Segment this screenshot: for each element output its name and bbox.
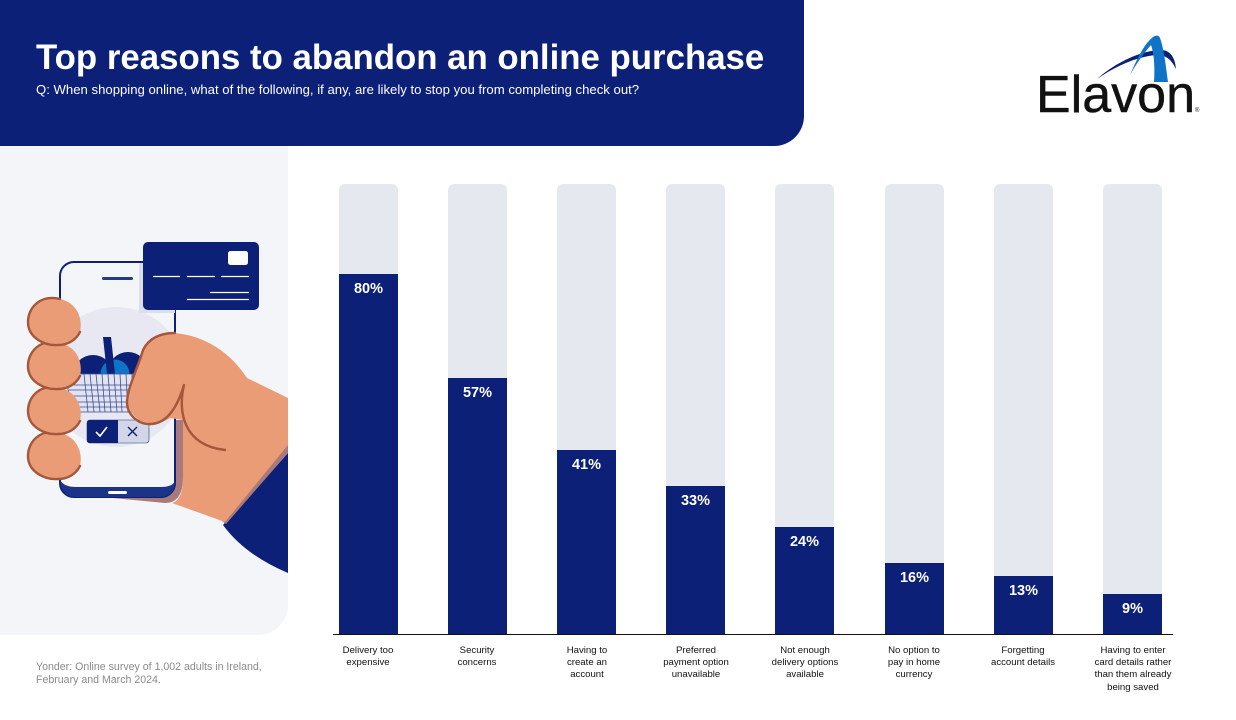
basket contents [73,337,148,395]
bar: Forgetting account details 13% [994,184,1053,635]
label: Not enough delivery options available: delivery options [772,657,838,668]
label: Preferred payment option unavailable [663,645,729,680]
label: Not enough delivery options available: available [786,669,824,680]
label: Delivery too expensive: Delivery too [343,645,393,656]
bar: Forgetting account details 13%: 13% [1009,583,1038,599]
label: Forgetting account details [991,645,1055,668]
bar: Delivery too expensive 80%: 80% [354,281,383,297]
finger 2 [28,342,81,389]
bar: Not enough delivery options available 24% [775,184,834,635]
credit card [139,242,259,313]
label: Having to create an account: account [570,669,604,680]
header banner [0,0,804,146]
source note [36,661,262,686]
label: Forgetting account details: Forgetting [1001,645,1045,656]
label: No option to pay in home currency: No option to [888,645,940,656]
label: Security concerns: concerns [458,657,496,668]
bar: No option to pay in home currency 16%: 16% [900,570,929,586]
label: Having to enter card details: being saved [1107,682,1159,693]
bar: Security concerns 57%: 57% [463,385,492,401]
bar: Preferred payment option unavailable 33% [666,184,725,635]
label: Having to enter card details: Having to enter [1100,645,1166,656]
panel: illustration background [0,146,288,635]
label: Security concerns: Security [460,645,494,656]
label: Delivery too expensive [343,645,393,668]
basket grid [68,374,142,412]
bar: Having to enter card details 9%: 9% [1122,601,1143,617]
phone shadow [113,420,183,503]
label: Not enough delivery options available [772,645,838,680]
fingers [28,298,81,479]
axis [333,634,1173,635]
thumb outline [127,333,225,450]
bar: No option to pay in home currency 16% [885,184,944,635]
label: Having to create an account: Having to [567,645,607,656]
bar: Not enough delivery options available 24%: 24% [790,534,819,550]
finger 4 [28,432,81,479]
label: Having to enter card details [1094,645,1172,693]
label: Having to enter card details: than them already [1095,669,1171,680]
survey question: Q: When shopping online, what of the following, if any, are likely to stop you from completing check out? [36,82,639,97]
illustration: hand holding phone with card and basket [26,242,288,573]
label: Having to create an account [567,645,607,680]
basket circle [66,307,172,447]
bar: Security concerns 57% [448,184,507,635]
label: Delivery too expensive: expensive [346,657,390,668]
source note: February and March 2024. [36,674,161,686]
label: Preferred payment option unavailable: Preferred [676,645,716,656]
logo: Elavon: ® [1195,107,1200,114]
logo: Elavon [1036,36,1200,124]
label: Forgetting account details: account details [991,657,1055,668]
sleeve [223,453,288,573]
label: Having to create an account: create an [567,657,607,668]
bar: Having to enter card details 9% [1103,184,1162,635]
phone [60,262,175,497]
source note: Yonder: Online survey of 1,002 adults in Ireland, [36,661,262,673]
bar: Delivery too expensive 80% [339,184,398,635]
logo: Elavon: Elavon [1036,66,1195,124]
label: Preferred payment option unavailable: unavailable [672,669,720,680]
bar: Having to create an account 41%: 41% [572,457,601,473]
label: Not enough delivery options available: Not enough [780,645,830,656]
label: No option to pay in home currency [888,645,940,680]
label: Preferred payment option unavailable: payment option [663,657,729,668]
label: Having to enter card details: card details rather [1095,657,1171,668]
bar: Having to create an account 41% [557,184,616,635]
finger 3 [28,387,81,434]
title: Top reasons to abandon an online purchase [36,38,764,77]
label: Security concerns [458,645,496,668]
finger 1 [28,298,81,345]
label: No option to pay in home currency: currency [896,669,932,680]
bar: Preferred payment option unavailable 33%: 33% [681,493,710,509]
sleeve shadow [222,444,288,524]
label: No option to pay in home currency: pay in home [888,657,940,668]
hand [128,333,288,522]
choice buttons [87,420,149,443]
